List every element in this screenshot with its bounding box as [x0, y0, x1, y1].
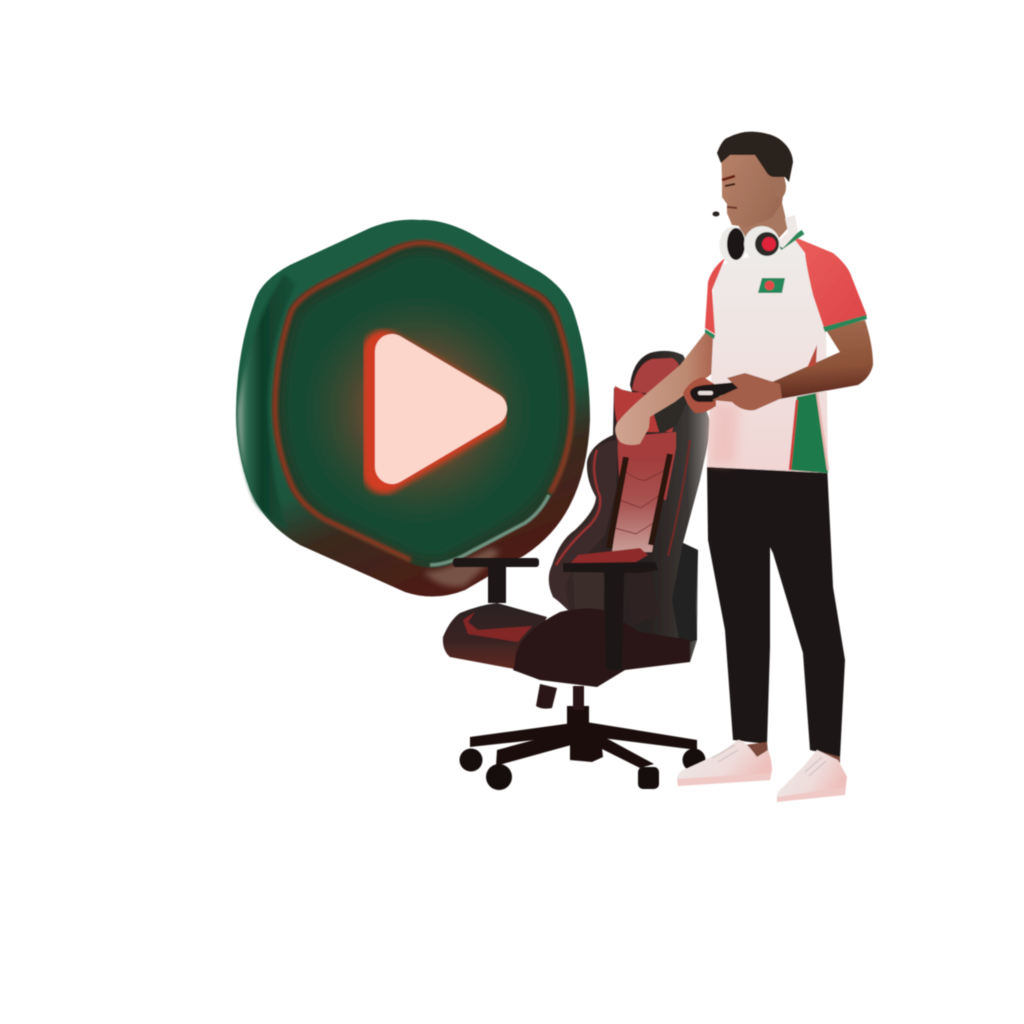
microphone — [712, 212, 720, 216]
shoulder pad — [617, 432, 676, 500]
right ankle — [815, 750, 840, 763]
flag patch — [758, 278, 785, 293]
left sole — [677, 773, 771, 786]
gas cylinder — [573, 686, 584, 710]
lumbar cushions — [573, 572, 605, 612]
left arm to chair — [615, 333, 716, 445]
right ear cup — [744, 226, 780, 262]
left armrest — [453, 558, 539, 603]
right lumbar — [625, 572, 660, 625]
front hand — [712, 373, 782, 410]
harness strips — [609, 454, 670, 548]
left cup cushion — [727, 228, 745, 260]
right armrest — [563, 562, 658, 670]
left cuff — [705, 329, 715, 339]
right cup red center — [762, 237, 776, 251]
side panel green — [790, 393, 828, 473]
gas lift — [567, 706, 589, 732]
gamer figure — [615, 132, 873, 802]
badge inner bevel — [272, 240, 575, 568]
trousers — [707, 465, 845, 757]
base hub — [570, 730, 603, 762]
chair seat cushion pad — [570, 548, 648, 564]
chair backrest — [549, 351, 712, 662]
hair — [717, 132, 793, 182]
left ankle — [745, 742, 768, 757]
chair seat — [443, 603, 547, 670]
hexagon play badge — [236, 220, 590, 597]
side panel red stripe — [790, 400, 797, 470]
left laces — [712, 745, 738, 762]
left ear cup — [720, 226, 746, 264]
ear — [774, 176, 786, 198]
head — [721, 145, 785, 227]
play button glow — [300, 292, 536, 528]
headphones — [720, 215, 798, 264]
lever — [536, 684, 557, 709]
right side wing — [672, 543, 698, 645]
neck — [737, 190, 788, 248]
side panel upper — [807, 345, 817, 368]
right laces — [805, 757, 826, 776]
chevron stitching — [615, 470, 665, 534]
badge outer rim — [236, 220, 590, 597]
play triangle — [392, 351, 490, 467]
side panel pink trim — [817, 393, 828, 470]
eye — [725, 184, 735, 186]
headband collar — [775, 215, 798, 248]
shirt neck trim — [780, 232, 803, 248]
right cuff — [823, 315, 867, 332]
play button halo — [384, 352, 486, 472]
shirt body — [707, 233, 828, 473]
badge red inner rim — [275, 243, 572, 560]
left sleeve — [705, 258, 725, 334]
chair base star — [460, 684, 706, 790]
right arm — [772, 320, 873, 399]
right piping — [668, 440, 690, 556]
right sleeve — [792, 236, 867, 331]
badge left edge highlight — [238, 274, 296, 530]
center lumbar pad — [612, 456, 668, 552]
left shoe — [677, 740, 772, 786]
eyebrow — [722, 176, 735, 180]
badge inner face — [285, 254, 563, 557]
badge bottom gloss — [430, 495, 549, 565]
mouth — [727, 207, 737, 208]
seat red inset — [463, 612, 532, 642]
badge bottom sheen — [424, 548, 500, 587]
bolster red piping — [556, 450, 600, 565]
shirt pink tint — [710, 400, 740, 465]
controller hand — [683, 377, 716, 413]
chair headrest pad — [632, 358, 680, 398]
seat side panel — [513, 608, 690, 687]
side bolster — [550, 440, 618, 612]
headrest dark side — [650, 395, 690, 435]
controller — [690, 382, 740, 402]
right sole — [777, 787, 846, 802]
gaming chair — [443, 351, 712, 790]
right shoe — [777, 750, 847, 800]
casters — [460, 748, 706, 790]
right cup dark — [755, 232, 779, 256]
headrest wing — [614, 386, 675, 432]
